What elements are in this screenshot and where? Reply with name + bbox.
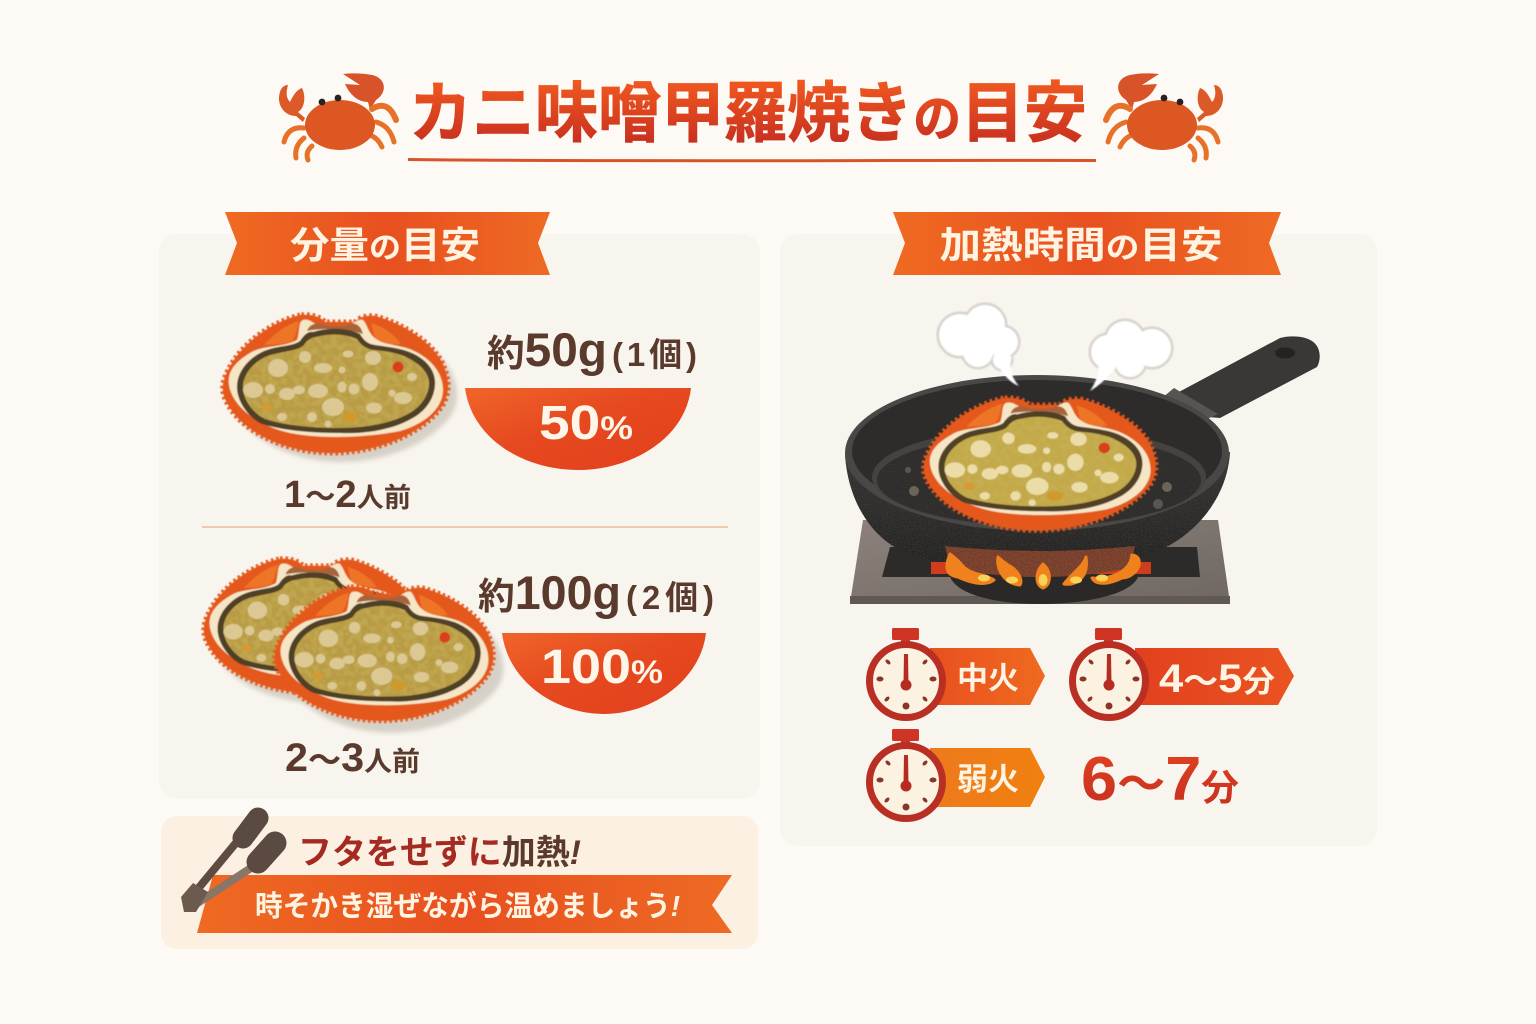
chart: 50% half circle bbox=[465, 388, 691, 470]
text: 50g amount: (1個) bbox=[612, 336, 697, 373]
icon: right crab bbox=[1106, 73, 1223, 160]
banner: heating time heading bbox=[893, 212, 1281, 275]
illustration: stove bbox=[850, 520, 1230, 604]
chart: 100% half circle bbox=[502, 633, 706, 714]
panel: amount guide bbox=[159, 212, 760, 799]
text: heat without lid: フタをせずに加熱! bbox=[298, 834, 581, 872]
badge: medium heat time: 4～5分 bbox=[1159, 657, 1275, 701]
banner: amount guide heading: 分量の目安 bbox=[290, 225, 480, 266]
title: カニ味噌甲羅焼きの目安 bbox=[409, 76, 1087, 150]
badge: medium heat bbox=[870, 628, 1045, 718]
text: 50g amount bbox=[487, 323, 697, 376]
illustration: steam right bbox=[1090, 321, 1171, 391]
chart: 50% half circle: 50% bbox=[539, 397, 633, 450]
title underline bbox=[408, 160, 1096, 161]
banner: stir tip bbox=[197, 875, 732, 933]
shell illustration: one crab shell bbox=[223, 315, 457, 462]
illustration: steam left bbox=[939, 305, 1019, 386]
text: servings 1 to 2: 1～2人前 bbox=[284, 474, 411, 516]
chart: 100% half circle: 100 % bbox=[541, 641, 663, 694]
shell illustration: two crab shells bbox=[204, 559, 503, 733]
banner: amount guide heading bbox=[225, 212, 550, 275]
text: 100g amount: 約100g bbox=[478, 566, 621, 619]
text: low heat time: 6～7分 bbox=[1081, 745, 1239, 814]
text: 100g amount: (2個) bbox=[626, 579, 714, 616]
panel: heating time guide bbox=[780, 212, 1377, 846]
illustration: crab shell in pan bbox=[924, 398, 1156, 530]
banner: stir tip: 時そかき湿ぜながら温めましょう! bbox=[255, 889, 680, 923]
icon: tongs bbox=[181, 818, 275, 912]
banner: heating time heading: 加熱時間 の目安 bbox=[940, 225, 1222, 266]
illustration: burner flames bbox=[931, 546, 1151, 588]
text: servings 2 to 3: 2～3人前 bbox=[285, 736, 420, 780]
text: 50g amount: 約50g bbox=[487, 323, 607, 376]
badge: low heat bbox=[870, 729, 1045, 818]
badge: medium heat: 中火 bbox=[957, 661, 1019, 696]
text: 100g amount bbox=[478, 566, 714, 619]
illustration: frying pan bbox=[845, 336, 1320, 567]
icon: left crab bbox=[279, 73, 396, 160]
panel: tip box bbox=[161, 816, 758, 949]
badge: low heat: 弱火 bbox=[957, 762, 1019, 797]
badge: medium heat time bbox=[1072, 628, 1294, 718]
